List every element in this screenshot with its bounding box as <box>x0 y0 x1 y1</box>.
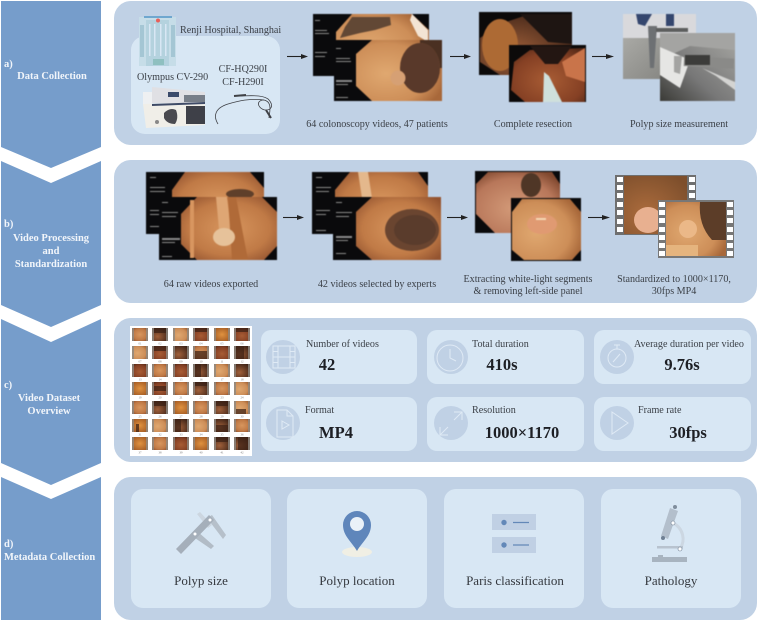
chevron: d) Metadata Collection: Metadata Collection <box>4 552 95 563</box>
icon: stopwatch <box>608 345 626 367</box>
stat card: average duration: 9.76s <box>664 355 700 374</box>
contact sheet of 42 video thumbnails: 22 <box>200 396 203 400</box>
contact sheet of 42 video thumbnails: 18 <box>240 378 244 382</box>
stat card: frame rate: Frame rate <box>638 405 682 416</box>
contact sheet of 42 video thumbnails: 33 <box>180 432 183 436</box>
chevron: b) Video Processing and Standardization: Standardization <box>15 259 87 270</box>
contact sheet of 42 video thumbnails: 36 <box>240 432 244 436</box>
card: polyp size <box>131 489 271 608</box>
contact sheet of 42 video thumbnails: 26 <box>158 414 162 418</box>
card: Paris classification <box>444 489 584 608</box>
contact sheet of 42 video thumbnails: 08 <box>158 360 162 364</box>
chevron: b) Video Processing and Standardization: Video Processing <box>13 233 90 244</box>
image stack: colonoscopy videos <box>313 14 442 101</box>
icon: clock <box>437 345 463 371</box>
caption: Complete resection <box>494 119 572 130</box>
caption: Standardized to 1000×1170, <box>617 274 731 285</box>
processor label: Olympus CV-290 <box>137 72 208 83</box>
contact sheet of 42 video thumbnails: 29 <box>220 414 224 418</box>
image stack: white-light segments <box>475 171 581 261</box>
icon: caliper <box>176 512 226 554</box>
chevron: c) Video Dataset Overview: Overview <box>27 406 71 417</box>
contact sheet of 42 video thumbnails: 17 <box>220 378 224 382</box>
panel: video dataset overview <box>114 318 757 462</box>
icon: expand arrows <box>440 412 462 435</box>
chevron: c) Video Dataset Overview: Video Dataset <box>18 393 81 404</box>
stat card: format: MP4 <box>319 423 353 442</box>
caption: 30fps MP4 <box>652 286 696 297</box>
contact sheet of 42 video thumbnails: 27 <box>180 414 183 418</box>
card: polyp location <box>287 489 427 608</box>
arrow <box>588 215 610 220</box>
caption: Polyp size measurement <box>630 119 728 130</box>
card: polyp location: Polyp location <box>319 573 395 588</box>
card: pathology: Pathology <box>645 573 698 588</box>
scope models <box>219 64 267 88</box>
contact sheet of 42 video thumbnails: 06 <box>240 342 244 346</box>
icon: location pin <box>342 511 372 557</box>
caption <box>617 274 731 297</box>
stat card: average duration <box>594 330 751 384</box>
icon: list <box>492 514 536 553</box>
arrow <box>287 54 308 59</box>
chevron: c) Video Dataset Overview: c) <box>4 380 13 391</box>
caption <box>464 274 593 297</box>
contact sheet of 42 video thumbnails: 24 <box>240 396 244 400</box>
contact sheet of 42 video thumbnails: 12 <box>240 360 244 364</box>
contact sheet of 42 video thumbnails: 09 <box>180 360 183 364</box>
caption: 64 colonoscopy videos, 47 patients <box>306 119 448 130</box>
caption: Extracting white-light segments <box>464 274 593 285</box>
stat card: resolution: Resolution <box>472 405 516 416</box>
contact sheet of 42 video thumbnails: 07 <box>138 360 142 364</box>
chevron: a) Data Collection <box>1 1 101 168</box>
contact sheet of 42 video thumbnails: 38 <box>158 450 162 454</box>
card: polyp size: Polyp size <box>174 573 228 588</box>
contact sheet of 42 video thumbnails: 39 <box>180 450 183 454</box>
stat card: frame rate <box>594 397 751 451</box>
chevron: c) Video Dataset Overview <box>1 319 101 485</box>
contact sheet of 42 video thumbnails: 42 <box>240 450 244 454</box>
card: pathology <box>601 489 741 608</box>
contact sheet of 42 video thumbnails: 21 <box>180 396 183 400</box>
stat card: total duration: Total duration <box>472 339 529 350</box>
contact sheet of 42 video thumbnails: 14 <box>158 378 162 382</box>
chevron: b) Video Processing and Standardization: b) <box>4 219 14 230</box>
contact sheet of 42 video thumbnails <box>130 326 252 456</box>
contact sheet of 42 video thumbnails: 16 <box>200 378 203 382</box>
contact sheet of 42 video thumbnails: 13 <box>138 378 142 382</box>
scope models: CF-H290I <box>222 77 264 88</box>
image stack: raw videos <box>146 172 277 260</box>
panel: data collection <box>114 1 757 145</box>
contact sheet of 42 video thumbnails: 02 <box>158 342 162 346</box>
contact sheet of 42 video thumbnails: 35 <box>220 432 224 436</box>
chevron: d) Metadata Collection <box>1 477 101 620</box>
image stack: caliper measurement photos <box>623 14 735 101</box>
stat card: total duration: 410s <box>486 355 518 374</box>
card: Paris classification: Paris classification <box>466 573 564 588</box>
image stack: standardized film frames <box>615 175 734 258</box>
stat card: format: Format <box>305 405 334 416</box>
stat card: format <box>261 397 417 451</box>
arrow <box>283 215 304 220</box>
arrow <box>450 54 471 59</box>
chevron: b) Video Processing and Standardization: and <box>43 246 60 257</box>
icon: colonoscope <box>215 95 272 124</box>
image stack: resection <box>479 12 586 102</box>
icon: microscope <box>652 505 687 562</box>
contact sheet of 42 video thumbnails: 25 <box>138 414 142 418</box>
stat card: total duration <box>427 330 584 384</box>
contact sheet of 42 video thumbnails: 05 <box>220 342 224 346</box>
contact sheet of 42 video thumbnails: 23 <box>220 396 224 400</box>
arrow <box>592 54 614 59</box>
panel: video processing <box>114 160 757 303</box>
contact sheet of 42 video thumbnails: 41 <box>220 450 224 454</box>
stat card: number of videos: Number of videos <box>306 339 379 350</box>
caption: 42 videos selected by experts <box>318 279 436 290</box>
contact sheet of 42 video thumbnails: 19 <box>138 396 142 400</box>
contact sheet of 42 video thumbnails: 37 <box>138 450 142 454</box>
icon: play <box>612 412 628 434</box>
contact sheet of 42 video thumbnails: 11 <box>221 360 224 364</box>
chevron: b) Video Processing and Standardization <box>1 161 101 327</box>
contact sheet of 42 video thumbnails: 01 <box>138 342 142 346</box>
stat card: resolution <box>427 397 584 451</box>
arrow <box>447 215 468 220</box>
icon: video file <box>277 410 293 437</box>
contact sheet of 42 video thumbnails: 15 <box>180 378 183 382</box>
stat card: number of videos: 42 <box>319 355 335 374</box>
contact sheet of 42 video thumbnails: 20 <box>158 396 162 400</box>
panel: metadata collection <box>114 477 757 620</box>
stat card: number of videos <box>261 330 417 384</box>
scope models: CF-HQ290I <box>219 64 267 75</box>
stat card: frame rate: 30fps <box>669 423 707 442</box>
contact sheet of 42 video thumbnails: 10 <box>200 360 203 364</box>
chevron: d) Metadata Collection: d) <box>4 539 14 550</box>
contact sheet of 42 video thumbnails: 03 <box>180 342 183 346</box>
chevron: a) Data Collection: Data Collection <box>17 71 87 82</box>
caption: & removing left-side panel <box>473 286 583 297</box>
hospital label: Renji Hospital, Shanghai <box>180 25 281 36</box>
contact sheet of 42 video thumbnails: 30 <box>240 414 244 418</box>
stat card: average duration: Average duration per video <box>634 339 744 350</box>
image stack: selected videos <box>312 172 441 260</box>
contact sheet of 42 video thumbnails: 28 <box>200 414 203 418</box>
contact sheet of 42 video thumbnails: 04 <box>200 342 203 346</box>
chevron: a) Data Collection: a) <box>4 59 13 70</box>
caption: 64 raw videos exported <box>164 279 258 290</box>
contact sheet of 42 video thumbnails: 32 <box>158 432 162 436</box>
icon: hospital <box>139 16 176 66</box>
contact sheet of 42 video thumbnails: 40 <box>200 450 203 454</box>
equipment group <box>131 16 281 134</box>
stat card: resolution: 1000×1170 <box>485 423 559 442</box>
contact sheet of 42 video thumbnails: 34 <box>200 432 203 436</box>
contact sheet of 42 video thumbnails: 31 <box>138 432 142 436</box>
icon: Olympus processor <box>143 87 205 128</box>
icon: film <box>273 346 295 368</box>
